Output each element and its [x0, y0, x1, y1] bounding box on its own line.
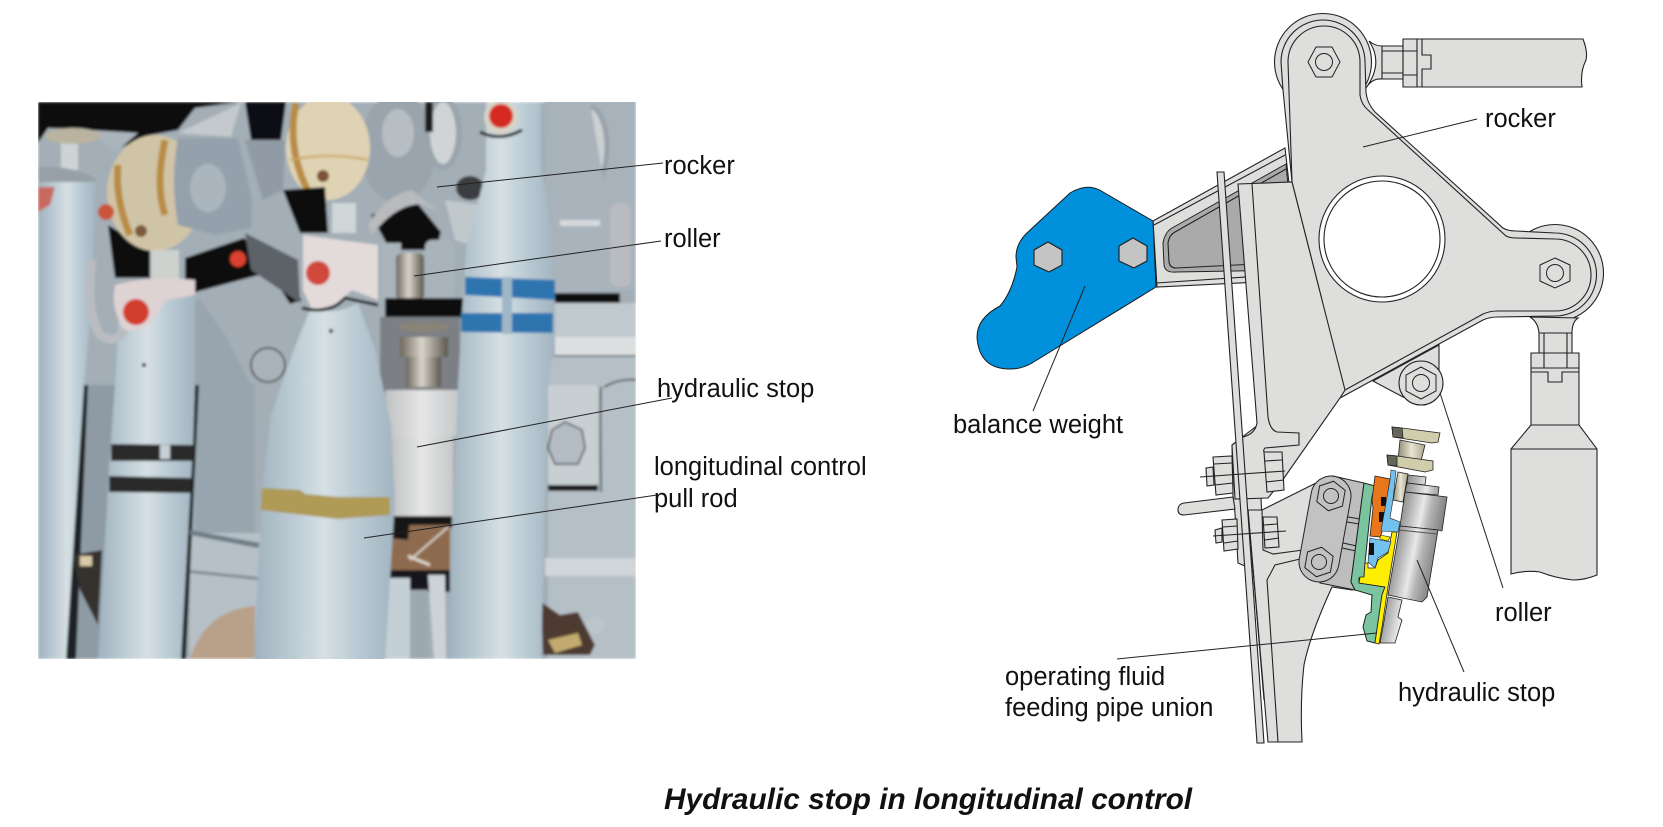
blue fluid chambers — [1368, 470, 1400, 568]
bracket and thin plate — [1178, 172, 1352, 743]
yellow fluid chambers — [1359, 532, 1397, 644]
label: rocker (diagram): rocker — [1485, 105, 1556, 133]
green housing — [1351, 483, 1385, 643]
mounting bolts — [1200, 452, 1286, 551]
bottom link rod — [1511, 317, 1597, 580]
arm — [1153, 148, 1300, 287]
callout: photo leader lines — [364, 163, 672, 538]
label: roller (diagram): roller — [1495, 599, 1552, 627]
diagram: rocker assembly — [977, 14, 1604, 743]
label: hydraulic stop (photo): hydraulic stop — [657, 375, 814, 403]
rocker knuckle 1 — [107, 135, 203, 251]
rod 2 — [151, 250, 179, 280]
label: hydraulic stop (diagram): hydraulic stop — [1398, 679, 1555, 707]
rocker body — [1281, 20, 1596, 398]
label: longitudinal control pull rod (photo): longitudinal control — [654, 453, 867, 481]
panel: photo of longitudinal control — [38, 93, 636, 661]
label: rocker (photo): rocker — [664, 152, 735, 180]
knuckle 2 — [286, 96, 370, 200]
stop mounting block — [1304, 476, 1364, 590]
top link rod — [1366, 39, 1587, 88]
diagram: hydraulic stop cutaway — [1304, 427, 1447, 644]
label: longitudinal control pull rod (photo): pull rod — [654, 485, 738, 513]
label: balance weight: balance weight — [953, 411, 1123, 439]
stop + roller — [371, 200, 441, 250]
balance weight — [977, 187, 1156, 369]
rod 3 — [254, 303, 395, 661]
label: operating fluid feeding pipe union: operating fluid — [1005, 663, 1165, 691]
label: roller (photo): roller — [664, 225, 721, 253]
callout: diagram leader lines — [1033, 119, 1503, 672]
label: operating fluid feeding pipe union: feeding pipe union — [1005, 694, 1213, 722]
rocker ears — [1274, 14, 1604, 322]
rod 4 — [448, 102, 555, 659]
title: Hydraulic stop in longitudinal control — [664, 783, 1193, 816]
rod far left — [38, 175, 96, 659]
beige shaft and nuts — [1387, 427, 1440, 502]
grey cylinder — [1380, 475, 1447, 643]
icon: roller — [1373, 345, 1443, 405]
orange seal block — [1370, 476, 1390, 537]
right hardware — [366, 102, 432, 200]
